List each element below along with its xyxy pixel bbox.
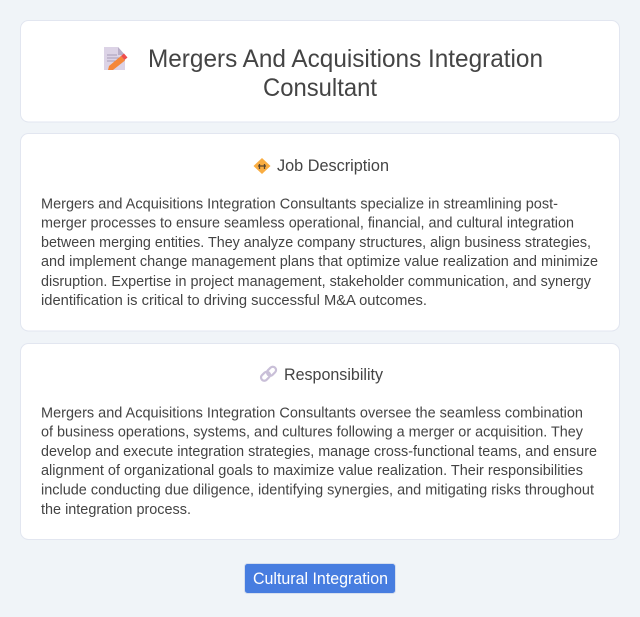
icon: chain link [260, 365, 277, 382]
heading: responsibility: Responsibility [284, 366, 384, 384]
title: Mergers And Acquisitions Integration [148, 45, 543, 73]
text block: job description: and implement change management plans that optimize value realization and minimize [41, 254, 598, 270]
panel: title card [20, 20, 620, 122]
text block: responsibility: include conducting due diligence, identifying synergies, and mitigating risks throughout [41, 482, 594, 498]
text block: responsibility: develop and execute integration strategies, manage cross-functional teams, and ensure [41, 444, 597, 460]
text block: job description: disruption. Expertise in project management, stakeholder communication, and synergy [41, 274, 592, 290]
icon: document with pencil [104, 47, 128, 70]
heading: job description: Job Description [277, 157, 389, 175]
text block: job description: identification is critical to driving successful M&A outcomes. [41, 293, 427, 309]
title: Consultant [263, 74, 377, 102]
icon: diamond road sign [254, 158, 270, 174]
text block: job description: merger processes to ensure seamless operational, financial, and cultural integration [41, 216, 574, 232]
text block: responsibility: Mergers and Acquisitions Integration Consultants oversee the seamless combination [41, 406, 583, 422]
text block: job description: between merging entities. They analyze company structures, align business strategies, [41, 235, 591, 251]
text block: responsibility: alignment of organizational goals to maximize value realization. Their responsibilities [41, 463, 583, 479]
text block: job description: Mergers and Acquisitions Integration Consultants specialize in streamlining post- [41, 196, 558, 212]
text block: responsibility: the integration process. [41, 502, 191, 518]
text block: job description [41, 196, 598, 309]
button: cultural integration [244, 564, 396, 594]
title [148, 45, 543, 102]
panel: job description [20, 134, 620, 331]
button: cultural integration: Cultural Integration [253, 570, 388, 588]
text block: responsibility [41, 406, 597, 518]
panel: responsibility [20, 344, 620, 540]
text block: responsibility: of business operations, systems, and cultures following a merger or acquisition. They [41, 424, 584, 440]
